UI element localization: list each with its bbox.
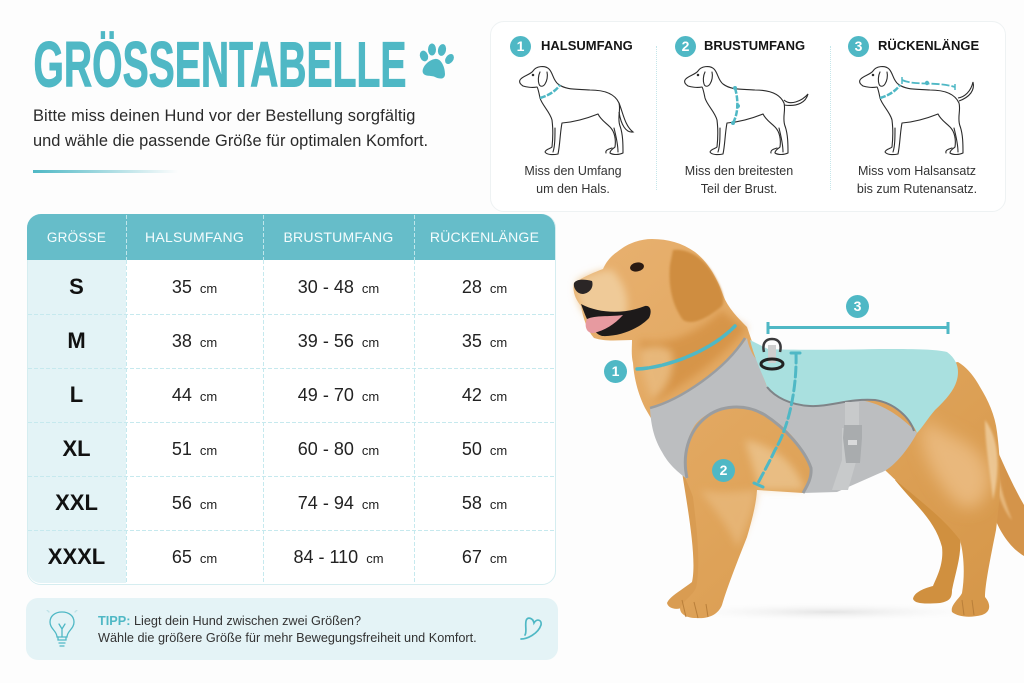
row XXXL: XXXL bbox=[48, 544, 105, 569]
thigh highlight bbox=[922, 420, 990, 508]
row XL: 51 cm bbox=[172, 439, 217, 459]
icon: dog neck measure bbox=[520, 67, 633, 155]
badge 1 bbox=[604, 360, 627, 383]
far hind leg bbox=[895, 475, 960, 604]
chest highlight bbox=[640, 346, 673, 400]
belly light fur bbox=[745, 440, 805, 490]
row L: L bbox=[70, 382, 83, 407]
row L bbox=[70, 382, 507, 407]
tail bbox=[978, 410, 1024, 556]
icon: dog back measure bbox=[860, 67, 973, 155]
badge 3: 3 bbox=[854, 298, 861, 314]
dog body bbox=[573, 239, 1024, 618]
step 1 caption: Miss den Umfang bbox=[524, 164, 622, 178]
step 1 caption: um den Hals. bbox=[536, 182, 610, 196]
icon: light bulb bbox=[46, 610, 78, 647]
row XXL bbox=[55, 490, 507, 515]
badge 2 bbox=[712, 459, 735, 482]
row L: 44 cm bbox=[172, 385, 217, 405]
step 3 heading: RÜCKENLÄNGE bbox=[878, 38, 979, 53]
row M: 35 cm bbox=[462, 331, 507, 351]
row XXL: 74 - 94 cm bbox=[298, 493, 379, 513]
dog photo illustration bbox=[572, 239, 1024, 618]
step 2 caption: Miss den breitesten bbox=[685, 164, 793, 178]
icon: dog chest measure bbox=[685, 67, 808, 155]
foreleg shade bbox=[700, 490, 757, 548]
step 3 caption: bis zum Rutenansatz. bbox=[857, 182, 977, 196]
row L: 49 - 70 cm bbox=[298, 385, 379, 405]
row XXXL: 84 - 110 cm bbox=[293, 547, 384, 567]
vest grey bbox=[650, 338, 917, 493]
step 3 caption bbox=[857, 164, 977, 196]
table header: HALSUMFANG bbox=[145, 229, 244, 245]
row XXXL: 65 cm bbox=[172, 547, 217, 567]
divider accent bbox=[33, 170, 178, 173]
line dogs bbox=[519, 66, 974, 156]
row XL bbox=[62, 436, 507, 461]
table header: BRUSTUMFANG bbox=[283, 229, 394, 245]
muzzle bbox=[576, 270, 627, 320]
table header: GRÖSSE bbox=[47, 230, 106, 245]
far front leg bbox=[667, 472, 725, 609]
badge 1: 1 bbox=[612, 363, 619, 379]
tongue bbox=[586, 315, 623, 333]
row XXL: 58 cm bbox=[462, 493, 507, 513]
row XXL: 56 cm bbox=[172, 493, 217, 513]
row S: 28 cm bbox=[462, 277, 507, 297]
row S bbox=[69, 274, 507, 299]
intro text bbox=[33, 107, 428, 150]
step 3 badge: 3 bbox=[855, 38, 862, 54]
panel: measuring guide bbox=[490, 21, 1006, 212]
size table bbox=[27, 214, 556, 585]
D-ring bbox=[763, 339, 781, 352]
mouth bbox=[581, 304, 651, 336]
collar fur shading bbox=[640, 310, 747, 402]
tip text bbox=[98, 614, 477, 645]
step 1 caption bbox=[524, 164, 622, 196]
row M: M bbox=[67, 328, 86, 353]
intro text: Bitte miss deinen Hund vor der Bestellung sorgfältig bbox=[33, 107, 416, 125]
eye bbox=[629, 261, 645, 273]
vest trim bbox=[767, 387, 914, 431]
row S: 30 - 48 cm bbox=[298, 277, 379, 297]
measure line 3 back bbox=[768, 322, 948, 334]
row XL: XL bbox=[62, 436, 91, 461]
step 2 caption bbox=[685, 164, 793, 196]
intro text: und wähle die passende Größe für optimalen Komfort. bbox=[33, 132, 428, 150]
row M: 39 - 56 cm bbox=[298, 331, 379, 351]
row S: S bbox=[69, 274, 84, 299]
badge 3 bbox=[846, 295, 869, 318]
row XXL: XXL bbox=[55, 490, 98, 515]
tip text: TIPP: Liegt dein Hund zwischen zwei Größen? bbox=[98, 614, 361, 628]
ear bbox=[670, 250, 723, 322]
row and column lines bbox=[28, 215, 554, 582]
step 2 badge bbox=[675, 36, 696, 57]
step 1 badge bbox=[510, 36, 531, 57]
row S: 35 cm bbox=[172, 277, 217, 297]
row XXXL: 67 cm bbox=[462, 547, 507, 567]
tip text: Wähle die größere Größe für mehr Bewegungsfreiheit und Komfort. bbox=[98, 631, 477, 645]
step 2 badge: 2 bbox=[682, 38, 689, 54]
step 3 badge bbox=[848, 36, 869, 57]
step 2 heading: BRUSTUMFANG bbox=[704, 38, 805, 53]
badge 2: 2 bbox=[720, 462, 727, 478]
row XL: 50 cm bbox=[462, 439, 507, 459]
row M bbox=[67, 328, 507, 353]
dog vest bbox=[650, 338, 958, 493]
row M: 38 cm bbox=[172, 331, 217, 351]
step 3 caption: Miss vom Halsansatz bbox=[858, 164, 976, 178]
icon: paw bbox=[420, 44, 454, 78]
paw toes bbox=[682, 600, 974, 618]
row L: 42 cm bbox=[462, 385, 507, 405]
measure line 1 neck bbox=[637, 326, 735, 369]
buckle strap bbox=[832, 402, 859, 490]
step 1 heading: HALSUMFANG bbox=[541, 38, 633, 53]
step 2 caption: Teil der Brust. bbox=[701, 182, 777, 196]
ground shadow bbox=[660, 602, 1000, 622]
tip callout bbox=[26, 598, 558, 660]
measure line 2 chest bbox=[754, 353, 800, 487]
icon: heart bbox=[520, 617, 542, 640]
row XXXL bbox=[48, 544, 507, 569]
table header: RÜCKENLÄNGE bbox=[430, 229, 539, 245]
main silhouette bbox=[573, 239, 1000, 618]
step 1 badge: 1 bbox=[517, 38, 524, 54]
row XL: 60 - 80 cm bbox=[298, 439, 379, 459]
nose bbox=[574, 280, 593, 294]
table header bbox=[47, 229, 539, 245]
vest teal bbox=[750, 340, 958, 433]
